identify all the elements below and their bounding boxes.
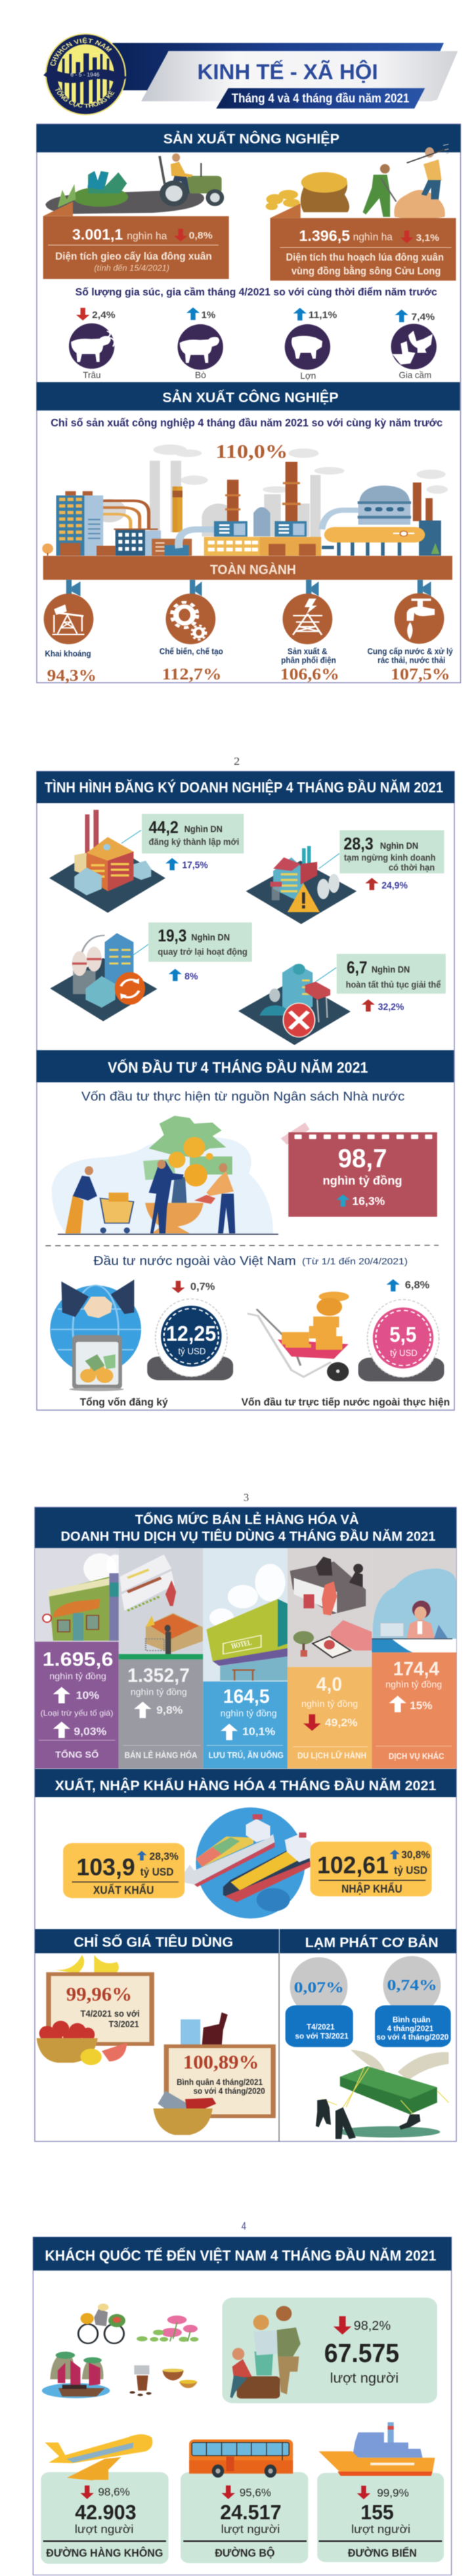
callout: total visitors: lượt người xyxy=(330,2370,399,2386)
illustration: food basket xyxy=(153,2091,216,2135)
callout: four-month CPI: Bình quân 4 tháng/2021 xyxy=(177,2078,263,2088)
callout: monthly CPI xyxy=(49,1955,152,2044)
change: dissolved: 32,2% xyxy=(378,1001,404,1012)
column: accommodation and catering: nghìn tỷ đồng xyxy=(221,1707,277,1719)
column: accommodation and catering: LƯU TRÚ, ĂN UỐNG xyxy=(209,1750,284,1760)
stat: FDI realised: 6,8% xyxy=(405,1279,430,1291)
stat: poultry xyxy=(391,309,437,381)
callout: total visitors: 67.575 xyxy=(324,2339,399,2368)
callout: sown rice area: 0,8% xyxy=(189,230,213,241)
icon: statistics office logo: TỔNG CỤC THỐNG KÊ xyxy=(54,87,116,108)
stat: by air: 42.903 xyxy=(75,2501,137,2524)
callout: exports: 103,9 xyxy=(77,1854,135,1880)
illustration: bus xyxy=(189,2439,293,2478)
column: total: 1.695,6 xyxy=(43,1649,113,1670)
heading: international visitors xyxy=(33,2237,452,2271)
heading: consumer price index xyxy=(35,1929,279,1953)
callout: total visitors xyxy=(222,2298,437,2403)
stat: mining: Khai khoáng xyxy=(45,650,91,658)
callout: sown rice area: nghìn ha xyxy=(127,230,167,242)
callout: newly registered: 44,2 xyxy=(149,817,179,837)
illustration: wheelbarrow with coins xyxy=(248,1292,349,1381)
stat: FDI realised: 5,5 xyxy=(389,1323,416,1347)
stat: cattle: Bò xyxy=(195,371,206,381)
stat: pigs xyxy=(285,308,337,381)
column: accommodation and catering: HOTEL xyxy=(230,1638,253,1650)
subtitle ribbon xyxy=(216,88,425,108)
heading: retail sales xyxy=(35,1507,456,1548)
panel: enterprises and investment xyxy=(36,771,454,1410)
connectors xyxy=(66,580,431,596)
heading: investment capital xyxy=(36,1050,454,1083)
callout: dissolved: 6,7 xyxy=(347,958,367,977)
column: total xyxy=(35,1548,125,1769)
callout: sown rice area: (tính đến 15/4/2021) xyxy=(94,264,169,273)
change: returned to operation: 8% xyxy=(184,970,198,981)
stat: registered capital xyxy=(147,1280,233,1381)
stat: by air xyxy=(41,2457,169,2564)
heading: industrial production xyxy=(36,382,460,410)
heading: retail sales: TỔNG MỨC BÁN LẺ HÀNG HÓA VÀ xyxy=(135,1511,359,1528)
column: accommodation and catering xyxy=(203,1548,288,1769)
subheading: foreign investment: (Từ 1/1 đến 20/4/2021) xyxy=(302,1256,408,1266)
panel: retail, trade and prices xyxy=(35,1507,456,2141)
column: travel: nghìn tỷ đồng xyxy=(301,1698,358,1709)
stat: FDI realised xyxy=(358,1279,444,1381)
callout: total visitors: 98,2% xyxy=(354,2319,391,2333)
callout: returned to operation: Nghìn DN xyxy=(191,933,230,943)
change: suspended xyxy=(365,878,408,891)
callout: suspended: tạm ngừng kinh doanh xyxy=(344,853,436,863)
callout: returned to operation: quay trở lại hoạt động xyxy=(158,947,248,957)
change: newly registered: 17,5% xyxy=(182,859,208,870)
main title: KINH TẾ - XÃ HỘI xyxy=(198,59,378,84)
stat: core inflation monthly: T4/2021 xyxy=(307,2022,335,2031)
stat: core inflation monthly: so với T3/2021 xyxy=(295,2031,349,2040)
change: newly registered xyxy=(165,858,208,870)
callout: harvested rice area: nghìn ha xyxy=(353,231,393,243)
callout: newly registered: đăng ký thành lập mới xyxy=(149,837,239,847)
change: dissolved xyxy=(362,999,404,1012)
big value: overall index: 110,0% xyxy=(215,440,288,462)
stat: poultry: 7,4% xyxy=(412,311,435,322)
stat: pigs: Lợn xyxy=(300,372,316,381)
stat: cattle xyxy=(177,307,223,381)
stat: core inflation four months xyxy=(375,1956,451,2047)
illustration: fruit basket xyxy=(36,2021,127,2065)
column: travel: 4,0 xyxy=(316,1674,342,1696)
callout: exports xyxy=(63,1843,184,1898)
bar: whole industry: TOÀN NGÀNH xyxy=(210,561,296,577)
stat: manufacturing xyxy=(160,593,223,683)
illustration: factory skyline xyxy=(42,444,448,555)
change: returned to operation xyxy=(169,969,198,981)
stat: core inflation four months: so với 4 tháng/2020 xyxy=(376,2032,449,2042)
stat: manufacturing: Chế biến, chế tạo xyxy=(160,647,223,656)
stat: by road: 95,6% xyxy=(240,2486,271,2499)
callout: newly registered: Nghìn DN xyxy=(184,825,223,834)
callout: sown rice area: Diện tích gieo cấy lúa đông xuân xyxy=(55,251,212,262)
callout: suspended: Nghìn DN xyxy=(380,841,418,851)
callout: harvested rice area: 1.396,5 xyxy=(299,227,350,244)
stat: core inflation monthly: 0,07% xyxy=(294,1979,344,1996)
stat: by sea: 99,9% xyxy=(377,2487,409,2499)
stat: by road: 24.517 xyxy=(220,2501,282,2524)
stat: by air: lượt người xyxy=(75,2523,133,2536)
stat: by sea xyxy=(317,2422,444,2562)
stat: FDI realised: tỷ USD xyxy=(390,1348,418,1358)
illustration: suspended enterprise factory xyxy=(246,846,357,924)
column: travel: DU LỊCH LỮ HÀNH xyxy=(297,1750,366,1761)
stat: core inflation four months: Bình quân xyxy=(393,2015,431,2024)
stat: water supply and waste: rác thải, nước thải xyxy=(378,656,445,665)
stat: buffalo: 2,4% xyxy=(92,309,116,320)
banner plate xyxy=(141,51,458,101)
callout: suspended: 28,3 xyxy=(343,834,374,853)
page number 2: 2 xyxy=(234,756,240,767)
stat: by air: ĐƯỜNG HÀNG KHÔNG xyxy=(46,2546,163,2559)
callout: exports: tỷ USD xyxy=(141,1866,173,1878)
stat: mining xyxy=(44,593,97,685)
illustration: cargo ships xyxy=(181,1807,311,1918)
stat: electricity: 106,6% xyxy=(280,665,339,683)
subheading: foreign investment: Đầu tư nước ngoài vào Việt Nam xyxy=(93,1253,296,1268)
stat: by sea: 155 xyxy=(360,2501,394,2524)
stat: manufacturing: 112,7% xyxy=(162,665,222,683)
illustration: lotus flowers xyxy=(137,2315,198,2342)
stat: electricity xyxy=(280,593,339,683)
heading: import and export xyxy=(35,1769,456,1797)
column: total: 10% xyxy=(76,1690,99,1702)
stat: electricity: Sản xuất & xyxy=(288,647,328,656)
callout: imports: 102,61 xyxy=(317,1853,389,1878)
column: total: TỔNG SỐ xyxy=(55,1749,98,1760)
callout: monthly CPI: T3/2021 xyxy=(109,2020,139,2029)
stat: core inflation four months: 0,74% xyxy=(387,1977,437,1994)
heading: core inflation xyxy=(280,1929,456,1953)
stat: buffalo xyxy=(69,308,116,381)
icon: statistics office logo xyxy=(43,33,127,116)
callout: imports xyxy=(311,1841,431,1897)
callout: harvested rice area: 3,1% xyxy=(416,232,439,244)
heading: agricultural production xyxy=(36,124,460,152)
callout: sown rice area: 3.001,1 xyxy=(72,225,123,243)
page number 4: 4 xyxy=(242,2220,246,2232)
illustration: ship xyxy=(318,2422,435,2476)
illustration: rice harvest xyxy=(266,144,448,219)
stat: by sea: lượt người xyxy=(351,2523,410,2536)
column: accommodation and catering: 10,1% xyxy=(242,1726,275,1738)
callout: newly registered xyxy=(142,814,244,853)
column: retail goods: nghìn tỷ đồng xyxy=(131,1686,187,1698)
stat: mining: 94,3% xyxy=(47,666,97,685)
illustration: flying money held down by ropes xyxy=(316,2050,448,2139)
callout: four-month CPI xyxy=(166,2012,273,2116)
stat: registered capital: 12,25 xyxy=(166,1322,216,1346)
illustration: vendor on bicycle xyxy=(78,2304,125,2344)
illustration: new enterprise factory xyxy=(49,810,165,912)
stat: core inflation monthly xyxy=(286,1957,353,2047)
stat: water supply and waste xyxy=(367,593,453,683)
label: total registered capital: Tổng vốn đăng ký xyxy=(80,1396,168,1407)
stat: by air: 98,6% xyxy=(98,2485,130,2498)
stat: registered capital: tỷ USD xyxy=(178,1346,206,1356)
change: suspended: 24,9% xyxy=(381,880,408,891)
callout: imports: NHẬP KHẨU xyxy=(341,1882,402,1896)
column: retail goods xyxy=(119,1548,203,1769)
callout: four-month CPI: so với 4 tháng/2020 xyxy=(194,2087,265,2096)
column: other services: DỊCH VỤ KHÁC xyxy=(389,1751,444,1761)
callout: state budget value: nghìn tỷ đồng xyxy=(322,1174,402,1188)
stat: by sea: ĐƯỜNG BIỂN xyxy=(348,2546,417,2559)
callout: harvested rice area xyxy=(270,218,456,280)
banner ribbon xyxy=(112,43,444,90)
callout: monthly CPI: 99,96% xyxy=(66,1983,132,2005)
column: other services: 15% xyxy=(410,1700,433,1712)
column: accommodation and catering: 164,5 xyxy=(223,1686,270,1707)
page number 3: 3 xyxy=(244,1492,249,1504)
icon: statistics office logo: CHXHCN VIỆT NAM xyxy=(50,37,113,66)
callout: sown rice area xyxy=(43,216,229,279)
stat: registered capital: 0,7% xyxy=(190,1280,215,1292)
callout: monthly CPI: T4/2021 so với xyxy=(81,2009,140,2019)
panel: international visitors xyxy=(33,2237,452,2575)
illustration: airplane xyxy=(45,2434,152,2480)
stat: electricity: phân phối điện xyxy=(281,656,336,665)
column: other services xyxy=(372,1548,456,1769)
column: total: 9,03% xyxy=(74,1726,106,1738)
column: travel: 49,2% xyxy=(325,1717,358,1729)
column: total: nghìn tỷ đồng xyxy=(49,1671,106,1682)
callout: state budget value: 98,7 xyxy=(338,1144,387,1173)
illustration: tourist family xyxy=(230,2306,301,2399)
column: total: (Loại trừ yếu tố giá) xyxy=(40,1708,113,1717)
callout: imports: tỷ USD xyxy=(394,1865,427,1877)
icon: statistics office logo: 6 - 5 - 1946 xyxy=(70,72,100,77)
heading: investment capital: VỐN ĐẦU TƯ 4 THÁNG ĐẦU NĂM 2021 xyxy=(108,1058,368,1076)
stat: water supply and waste: 107,5% xyxy=(391,665,450,683)
callout: dissolved: Nghìn DN xyxy=(372,965,410,975)
callout: returned to operation: 19,3 xyxy=(158,926,186,945)
title banner with logo xyxy=(43,33,458,116)
heading: agricultural production: SẢN XUẤT NÔNG NGHIỆP xyxy=(163,131,339,147)
illustration: coffee and food xyxy=(129,2365,198,2396)
illustration: tractor in the field xyxy=(43,154,224,216)
stat: poultry: Gia cầm xyxy=(399,371,431,381)
stat: by road: lượt người xyxy=(221,2523,280,2536)
callout: four-month CPI: 100,89% xyxy=(183,2051,259,2073)
column: retail goods: BÁN LẺ HÀNG HÓA xyxy=(125,1750,198,1760)
stat: cattle: 1% xyxy=(202,309,215,320)
heading: enterprise registration xyxy=(36,771,454,803)
column: travel xyxy=(288,1548,372,1769)
heading: industrial production: SẢN XUẤT CÔNG NGHIỆP xyxy=(162,389,339,406)
callout: suspended: có thời hạn xyxy=(389,863,435,872)
heading: core inflation: LẠM PHÁT CƠ BẢN xyxy=(305,1934,439,1950)
column: other services: nghìn tỷ đồng xyxy=(385,1679,442,1690)
stat: buffalo: Trâu xyxy=(83,371,101,381)
callout: returned to operation xyxy=(148,922,252,962)
column: other services: 174,4 xyxy=(393,1658,440,1680)
bar: whole industry xyxy=(43,556,452,580)
column: retail goods: 9,8% xyxy=(156,1705,183,1717)
callout: state budget value: 16,3% xyxy=(352,1195,385,1208)
column: retail goods: 1.352,7 xyxy=(127,1665,190,1686)
subheading: state budget investment: Vốn đầu tư thực hiện từ nguồn Ngân sách Nhà nước xyxy=(81,1089,404,1104)
callout: suspended xyxy=(339,830,444,873)
stat: by road xyxy=(181,2439,308,2563)
illustration: Ha Long boats xyxy=(42,2351,110,2398)
panel: agriculture and industry xyxy=(36,124,461,685)
stat: pigs: 11,1% xyxy=(309,309,337,320)
illustration: handshake, globe and donation box xyxy=(50,1279,141,1391)
callout: imports: 30,8% xyxy=(401,1849,430,1860)
illustration: money tree and people xyxy=(52,1116,278,1235)
callout: exports: 28,3% xyxy=(149,1851,179,1862)
callout: dissolved xyxy=(337,954,446,994)
stat: by road: ĐƯỜNG BỘ xyxy=(215,2546,275,2559)
stat: core inflation four months: 4 tháng/2021 xyxy=(387,2024,433,2033)
illustration: returning enterprise factory xyxy=(50,933,158,1021)
heading: consumer price index: CHỈ SỐ GIÁ TIÊU DÙNG xyxy=(74,1933,233,1950)
callout: state budget value xyxy=(281,1123,437,1217)
illustration: dissolved enterprise factory xyxy=(238,964,351,1045)
callout: exports: XUẤT KHẨU xyxy=(93,1883,154,1897)
